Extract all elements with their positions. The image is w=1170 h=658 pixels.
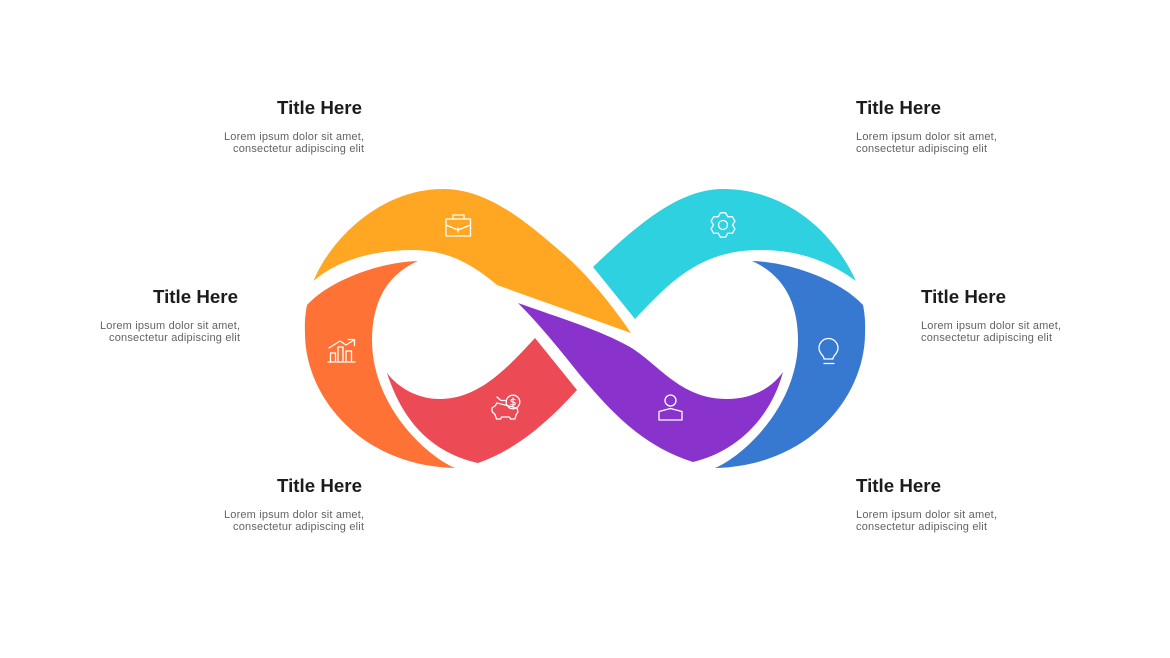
text block: bottom right: consectetur adipiscing elit <box>856 521 987 533</box>
text block: bottom right: Title Here <box>856 476 941 496</box>
text block: middle right <box>921 287 1061 344</box>
text block: middle left: consectetur adipiscing elit <box>109 332 240 344</box>
text block: middle left: Lorem ipsum dolor sit amet, <box>100 320 240 332</box>
segment: orange <box>305 261 455 468</box>
icon: gear <box>711 213 735 237</box>
icon: briefcase <box>446 215 470 236</box>
text block: middle right: consectetur adipiscing elit <box>921 332 1052 344</box>
icon: growth chart <box>328 340 355 362</box>
text block: bottom left <box>224 476 364 533</box>
segment: purple <box>518 303 783 462</box>
segment: red <box>387 338 577 463</box>
text block: top right <box>856 98 997 155</box>
text block: middle left <box>100 287 240 344</box>
text block: bottom left: Lorem ipsum dolor sit amet, <box>224 509 364 521</box>
text block: bottom left: Title Here <box>277 476 362 496</box>
text block: middle right: Lorem ipsum dolor sit amet, <box>921 320 1061 332</box>
segment: yellow <box>314 189 631 333</box>
text block: top left: Lorem ipsum dolor sit amet, <box>224 131 364 143</box>
text block: bottom left: consectetur adipiscing elit <box>233 521 364 533</box>
infinity diagram <box>305 189 865 468</box>
icon: light bulb <box>819 338 838 364</box>
text block: top right: consectetur adipiscing elit <box>856 143 987 155</box>
text block: bottom right <box>856 476 997 533</box>
text block: top left <box>224 98 364 155</box>
text block: top right: Lorem ipsum dolor sit amet, <box>856 131 997 143</box>
text block: middle right: Title Here <box>921 287 1006 307</box>
text block: top left: consectetur adipiscing elit <box>233 143 364 155</box>
icon: piggy bank with dollar coin <box>492 395 520 419</box>
text block: bottom right: Lorem ipsum dolor sit amet, <box>856 509 997 521</box>
segment: cyan <box>593 189 856 319</box>
text block: top left: Title Here <box>277 98 362 118</box>
segment: blue <box>715 261 865 468</box>
text block: middle left: Title Here <box>153 287 238 307</box>
text block: top right: Title Here <box>856 98 941 118</box>
icon: person <box>659 395 682 420</box>
